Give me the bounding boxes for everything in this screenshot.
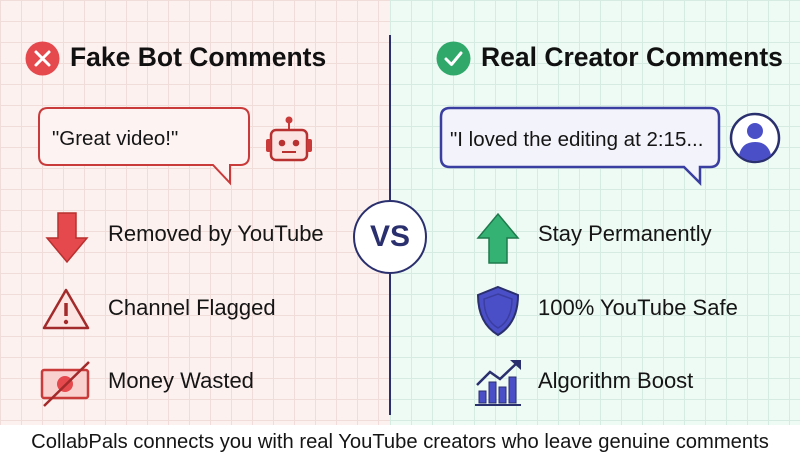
list: fake outcomes bbox=[40, 212, 324, 407]
icon: shield bbox=[477, 286, 519, 336]
list: real benefits bbox=[475, 213, 738, 406]
icon: green check bbox=[436, 42, 470, 76]
list: fake outcomes: Removed by YouTube bbox=[108, 221, 324, 246]
icon: red down arrow bbox=[46, 212, 88, 263]
callout: fake comment bubble: "Great video!" bbox=[52, 127, 178, 150]
footer text: CollabPals connects you with real YouTube creators who leave genuine comments bbox=[31, 431, 769, 453]
list: real benefits: Stay Permanently bbox=[538, 221, 712, 246]
icon: user avatar bbox=[730, 112, 780, 164]
list: real benefits: 100% YouTube Safe bbox=[538, 295, 738, 320]
divider line bbox=[389, 35, 391, 415]
icon: crossed money bbox=[40, 361, 90, 407]
vs badge: VS bbox=[370, 220, 410, 253]
icon: warning triangle bbox=[42, 288, 90, 330]
icon: robot bbox=[266, 116, 312, 162]
icon: growth chart bbox=[475, 360, 521, 406]
callout: fake comment bubble bbox=[38, 107, 250, 186]
list: real benefits: Algorithm Boost bbox=[538, 368, 693, 393]
callout: real comment bubble bbox=[440, 106, 720, 186]
callout: real comment bubble: "I loved the editing at 2:15... bbox=[450, 128, 703, 151]
heading: fake bot comments: Fake Bot Comments bbox=[70, 42, 326, 72]
list: fake outcomes: Channel Flagged bbox=[108, 295, 276, 320]
list: fake outcomes: Money Wasted bbox=[108, 368, 254, 393]
icon: red x bbox=[26, 42, 60, 76]
icon: green up arrow bbox=[476, 213, 520, 264]
heading: real creator comments: Real Creator Comments bbox=[481, 42, 783, 72]
vs badge bbox=[353, 200, 427, 274]
